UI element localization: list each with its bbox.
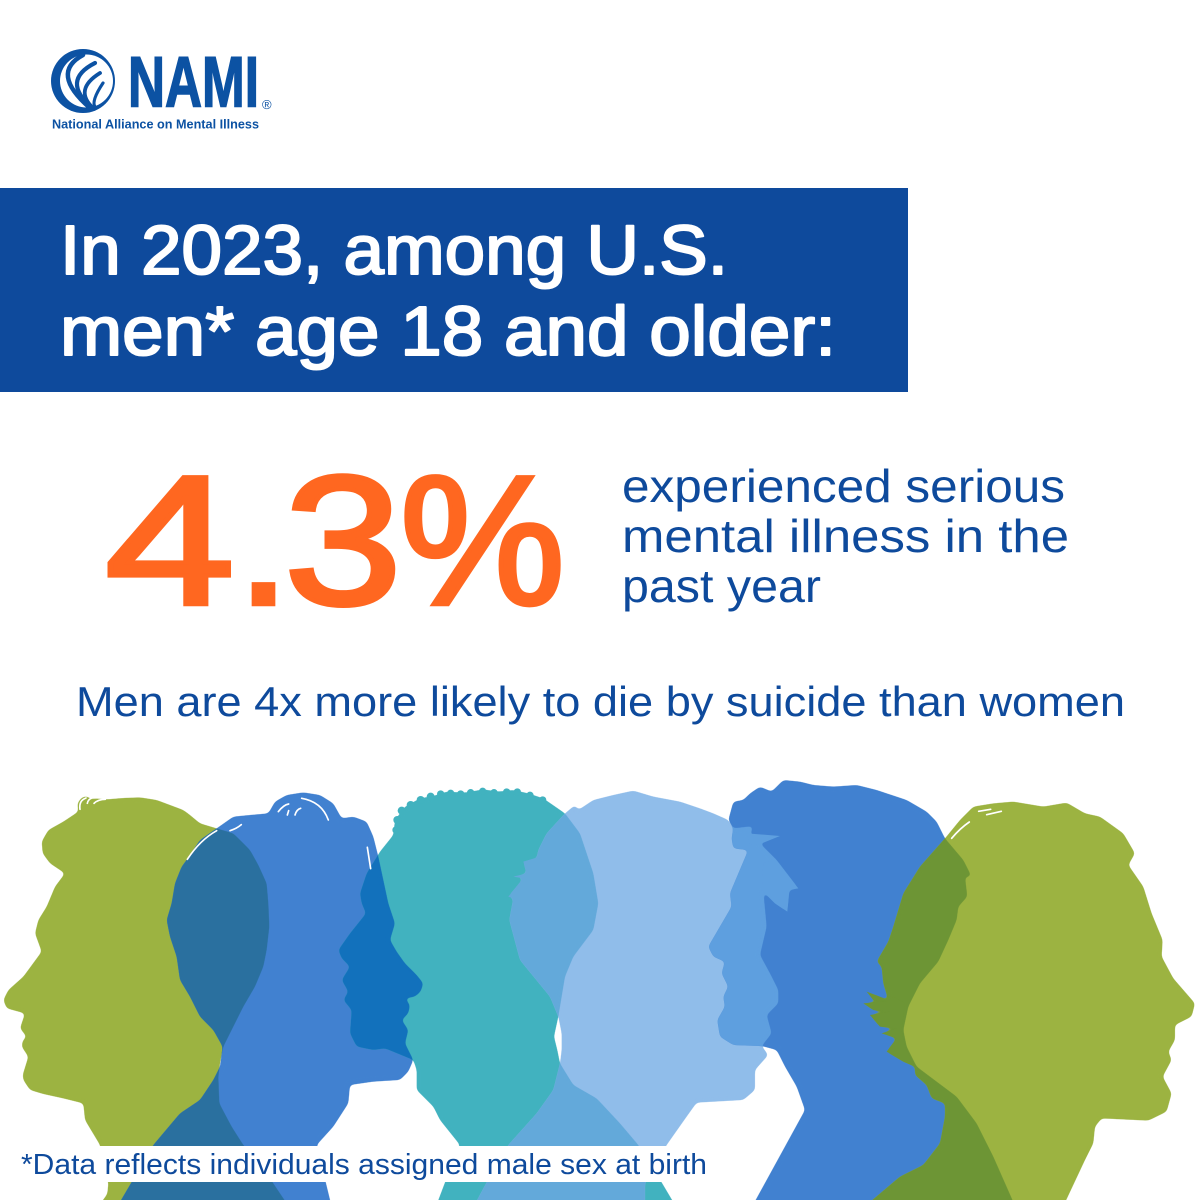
overlap heads 3 and 4 <box>478 814 646 1200</box>
footnote background strip <box>0 1146 716 1182</box>
head 6 hair strands at nape <box>863 992 915 1067</box>
head 4 forelock spike <box>747 833 780 845</box>
head 4 light blue <box>470 791 798 1200</box>
big statistic: 3 <box>284 437 402 643</box>
overlap heads 4 and 5 <box>709 823 794 1046</box>
head 3 teal <box>338 788 680 1200</box>
big statistic: 4 <box>105 437 235 643</box>
footnote <box>0 1146 716 1182</box>
headline line 1: In 2023, among U.S. <box>60 211 728 289</box>
big statistic: . <box>236 437 291 643</box>
headline line 2: men* age 18 and older: <box>60 292 836 370</box>
silhouettes: six overlapping head profiles <box>3 780 1195 1200</box>
hair highlights <box>80 798 1001 869</box>
description line 2: mental illness in the <box>622 510 1069 562</box>
head 5 blue <box>708 780 1018 1200</box>
statistic description <box>622 460 1069 612</box>
logo wordmark: NAMI <box>128 44 259 122</box>
description line 3: past year <box>622 560 821 612</box>
overlap heads 5 and 6 <box>868 838 1012 1200</box>
head 4 hair tuft at back <box>508 857 542 898</box>
head 6 green <box>857 802 1195 1200</box>
head 1 green <box>3 796 293 1200</box>
description line 1: experienced serious <box>622 460 1065 512</box>
head 4 forelock tuft <box>762 858 798 912</box>
overlap heads 1 and 2 <box>121 828 284 1200</box>
footnote text: *Data reflects individuals assigned male sex at birth <box>21 1149 707 1181</box>
big statistic: % <box>400 437 565 643</box>
suicide comparison statement: Men are 4x more likely to die by suicide than women <box>76 678 1125 725</box>
banner background <box>0 188 908 392</box>
head 2 blue <box>113 792 423 1200</box>
overlap heads 2 and 3 <box>339 855 423 1060</box>
headline banner <box>0 188 908 392</box>
registered mark: ® <box>262 97 272 112</box>
logo tagline: National Alliance on Mental Illness <box>52 118 259 132</box>
logo emblem <box>51 49 115 113</box>
logo: NAMI <box>51 44 272 132</box>
